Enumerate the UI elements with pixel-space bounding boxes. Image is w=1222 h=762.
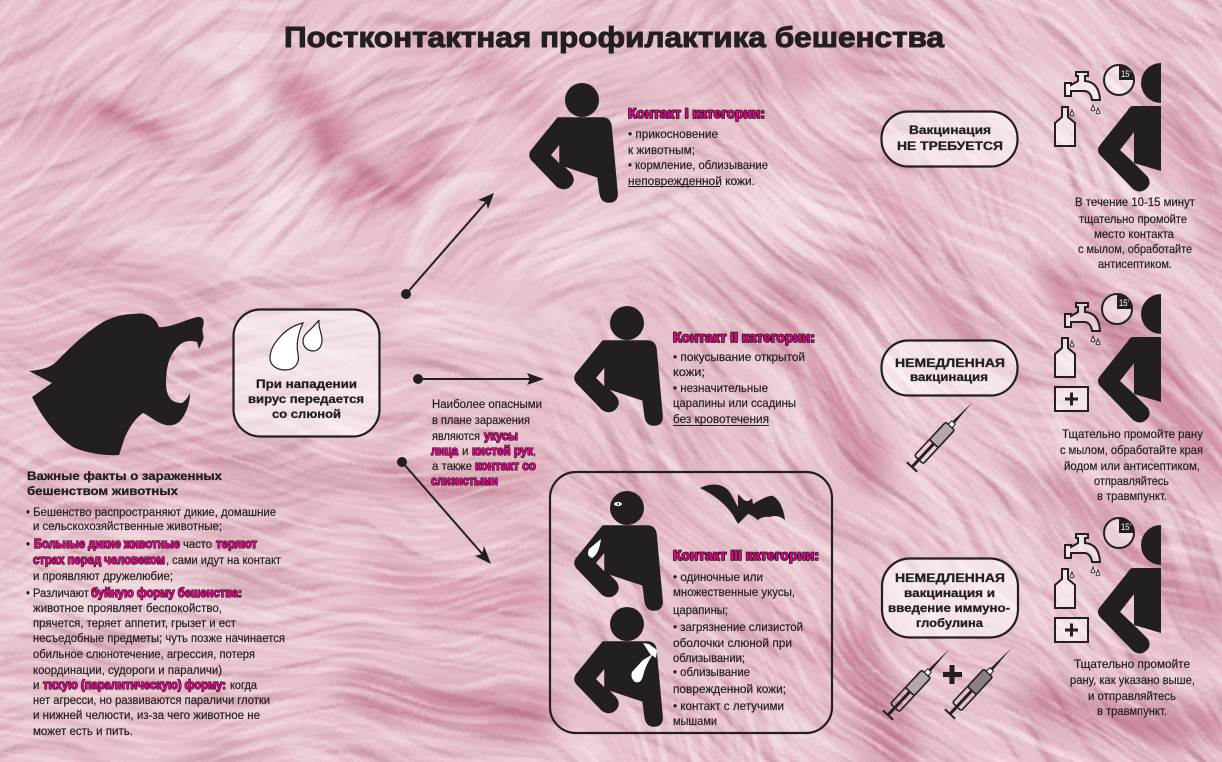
text: row 1 advice: В течение 10-15 минут xyxy=(1075,195,1195,209)
icon: water drops xyxy=(1091,105,1100,114)
text: category II description: царапины или ссадины xyxy=(673,396,796,410)
text: category II description xyxy=(673,350,805,426)
text: category III description: мышами xyxy=(673,714,717,728)
callout: immediate vaccination: НЕМЕДЛЕННАЯ xyxy=(895,356,1005,370)
panel: contact category I xyxy=(530,83,768,202)
text: category I description: к животным; xyxy=(628,143,695,157)
icon: first aid box xyxy=(1055,387,1088,411)
heading: facts: Важные факты о зараженных xyxy=(27,469,222,483)
text block: important facts: когда xyxy=(230,680,258,692)
text block: important facts: может есть и пить. xyxy=(33,726,133,738)
text: category I description: неповрежденной кожи. xyxy=(628,174,755,188)
text: category III description: поврежденной кожи; xyxy=(673,682,786,696)
text block: important facts: и xyxy=(33,680,39,692)
text: category III description: • контакт с летучими xyxy=(673,699,784,713)
icon: wolf head silhouette xyxy=(29,314,204,455)
icon group: wash wound, row 1 xyxy=(1055,63,1161,192)
icon: tap xyxy=(1065,303,1100,331)
icon: person with saliva on chest xyxy=(575,607,662,726)
text block: important facts: координации, судороги и параличи) xyxy=(33,665,222,677)
icon: saliva drops xyxy=(270,320,322,370)
icon: clock 15 min: 15' xyxy=(1121,69,1131,80)
text: category III description: • облизывание xyxy=(673,665,750,679)
text: category II description: • покусывание открытой xyxy=(673,350,805,364)
text: category III description: облизывании; xyxy=(673,651,745,665)
text: row 3 advice: рану, как указано выше, xyxy=(1070,673,1195,687)
heading: category II: Контакт II категории: xyxy=(673,330,815,345)
text: most dangerous contacts: контакт со xyxy=(475,459,536,473)
icon: antiseptic bottle xyxy=(1055,569,1075,608)
arrow: to category I xyxy=(401,193,494,299)
text: category I description xyxy=(628,127,768,188)
text block: important facts: животное проявляет беспокойство, xyxy=(33,603,222,615)
icon: person xyxy=(575,306,662,425)
text: row 2 advice xyxy=(1060,427,1203,503)
text: most dangerous contacts: , xyxy=(533,446,536,458)
text: category III description xyxy=(673,570,803,728)
text block: important facts: часто xyxy=(183,539,212,551)
text: row 2 advice: в травмпункт. xyxy=(1097,489,1167,503)
text block: important facts: • Различают xyxy=(26,588,90,600)
text block: important facts: и проявляют дружелюбие; xyxy=(33,571,173,583)
text: category III description: царапины; xyxy=(673,603,728,617)
icon: antiseptic bottle xyxy=(1055,338,1075,377)
callout: vaccination and immunoglobulin: НЕМЕДЛЕННАЯ xyxy=(895,571,1005,585)
icon: antiseptic bottle xyxy=(1055,107,1075,146)
callout: immediate vaccination xyxy=(882,340,1018,396)
text: row 2 advice: отправляйтесь xyxy=(1094,474,1169,488)
callout: vaccination and immunoglobulin: глобулина xyxy=(916,616,983,630)
callout: vaccination not required xyxy=(882,112,1018,166)
text block: important facts: страх перед человеком xyxy=(33,553,165,567)
text: row 3 advice xyxy=(1070,657,1195,718)
callout: vaccination not required: НЕ ТРЕБУЕТСЯ xyxy=(897,139,1003,153)
text: most dangerous contacts: кистей рук xyxy=(472,444,534,458)
icon: half head and body xyxy=(1098,63,1161,192)
text: category II description: • незначительные xyxy=(673,381,768,395)
text block: important facts: несъедобные предметы; чуть позже начинается xyxy=(33,633,285,645)
text: category III description: • одиночные или xyxy=(673,570,763,584)
text: row 2 advice: с мылом, обработайте края xyxy=(1060,443,1203,457)
panel: saliva transmission xyxy=(234,310,380,436)
text: most dangerous contacts xyxy=(431,399,542,488)
text block: important facts xyxy=(26,469,285,738)
icon group: wash wound, row 3 xyxy=(1055,518,1161,654)
text: row 1 advice: с мылом, обработайте xyxy=(1078,242,1192,256)
icon: first aid box xyxy=(1055,618,1088,642)
heading: category I: Контакт I категории: xyxy=(628,106,765,121)
icon: water drops xyxy=(1091,567,1100,576)
panel: contact category III xyxy=(550,472,832,733)
arrow: to category II xyxy=(413,373,544,385)
text: row 1 advice: антисептиком. xyxy=(1098,257,1172,271)
text: most dangerous contacts: слизистыми xyxy=(431,474,498,488)
text block: important facts: тихую (паралитическую) форму: xyxy=(43,678,226,692)
icon: tap xyxy=(1065,534,1100,562)
callout: immediate vaccination: вакцинация xyxy=(910,370,988,384)
icon: syringe xyxy=(907,398,977,472)
callout: vaccination and immunoglobulin xyxy=(882,558,1018,638)
text: category I description: • кормление, облизывание xyxy=(628,158,768,172)
text: category III description: множественные укусы, xyxy=(673,585,795,599)
icon: clock 15 min: 15' xyxy=(1121,522,1131,533)
text: row 3 advice: и отправляйтесь xyxy=(1088,689,1176,703)
text block: important facts: • Бешенство распространяют дикие, домашние xyxy=(26,507,276,519)
icon: clock 15 min: 15' xyxy=(1119,298,1129,309)
text block: important facts: прячется, теряет аппетит, грызет и ест xyxy=(33,618,237,630)
text: virus transmitted with saliva: со слюной xyxy=(272,407,341,421)
text block: important facts: буйную форму бешенства: xyxy=(91,586,242,600)
text: row 3 advice: в травмпункт. xyxy=(1097,704,1167,718)
arrow: to category III xyxy=(397,457,491,564)
text: row 1 advice: тщательно промойте xyxy=(1079,212,1187,226)
icon: half head and body xyxy=(1098,525,1161,654)
text: row 1 advice: место контакта xyxy=(1094,227,1174,241)
text: category II description: кожи; xyxy=(673,365,705,379)
text: virus transmitted with saliva: вирус передается xyxy=(248,392,364,406)
icon: half head and body xyxy=(1098,294,1161,422)
heading: category III: Контакт III категории: xyxy=(673,548,819,563)
text block: important facts: обильное слюнотечение, агрессия, потеря xyxy=(33,649,255,661)
callout: vaccination and immunoglobulin: вакцинация и xyxy=(904,586,995,600)
icon: water drops xyxy=(1091,336,1100,345)
text: most dangerous contacts: лица xyxy=(431,444,459,458)
icon: two syringes with plus xyxy=(883,643,1016,720)
callout: vaccination and immunoglobulin: введение иммуно- xyxy=(888,601,1010,615)
text block: important facts: и нижней челюсти, из-за чего животное не xyxy=(33,710,260,722)
text block: important facts: и сельскохозяйственные животные; xyxy=(33,521,222,533)
text: row 2 advice: йодом или антисептиком, xyxy=(1064,459,1200,473)
text: category III description: оболочки слюной при xyxy=(673,636,792,650)
icon: bat xyxy=(700,484,785,524)
text: category III description: • загрязнение слизистой xyxy=(673,620,803,634)
icon: person with bitten arm and eye xyxy=(575,491,662,610)
callout: vaccination not required: Вакцинация xyxy=(909,123,991,137)
text block: important facts: нет агресси, но развиваются параличи глотки xyxy=(33,695,270,707)
text: row 2 advice: Тщательно промойте рану xyxy=(1062,427,1203,441)
icon: tap xyxy=(1065,72,1100,100)
text: category I description: • прикосновение xyxy=(628,127,718,141)
heading: facts xyxy=(27,469,222,498)
text block: important facts: , сами идут на контакт xyxy=(166,555,282,567)
panel: contact category II xyxy=(575,306,815,426)
text block: important facts: теряют xyxy=(216,537,257,551)
text: virus transmitted with saliva: При нападении xyxy=(256,377,357,391)
text: row 3 advice: Тщательно промойте xyxy=(1074,657,1190,671)
text: most dangerous contacts: в плане заражения xyxy=(432,415,530,427)
text block: important facts: Больные дикие животные xyxy=(34,537,180,551)
text: row 1 advice xyxy=(1075,195,1195,271)
text: category II description: без кровотечения xyxy=(673,412,769,426)
text block: important facts: • xyxy=(26,539,30,551)
text: most dangerous contacts: Наиболее опасными xyxy=(432,399,542,411)
text: virus transmitted with saliva xyxy=(248,377,364,421)
icon: person xyxy=(530,83,617,202)
text: most dangerous contacts: укусы xyxy=(484,429,518,443)
text: most dangerous contacts: являются xyxy=(432,431,480,443)
title: Постконтактная профилактика бешенства xyxy=(284,22,945,54)
heading: facts: бешенством животных xyxy=(27,484,178,498)
text: most dangerous contacts: а также xyxy=(432,461,472,473)
icon group: wash wound, row 2 xyxy=(1055,294,1161,422)
text: most dangerous contacts: и xyxy=(462,446,468,458)
